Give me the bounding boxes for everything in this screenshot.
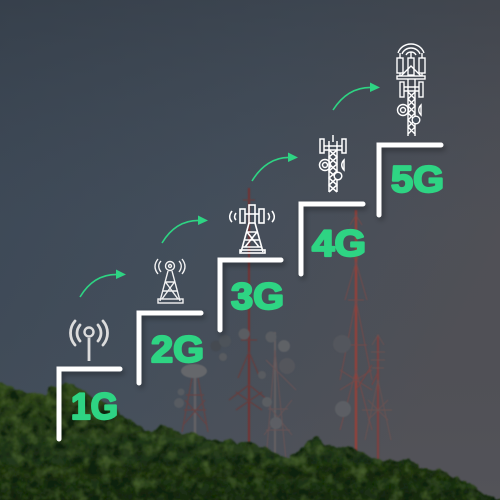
- label 5G: 5G: [391, 159, 444, 200]
- icon: 5G tower: [397, 44, 425, 136]
- step bracket 1G: [59, 369, 120, 439]
- tower C: [262, 332, 296, 462]
- step bracket 2G: [139, 313, 201, 383]
- step 3G: [220, 260, 284, 330]
- label 2G: 2G: [151, 329, 204, 370]
- tower B: [210, 188, 268, 444]
- step 2G: [139, 313, 204, 383]
- step bracket 5G: [379, 145, 441, 215]
- arrow: 3G to 4G: [252, 152, 298, 181]
- arrow: 1G to 2G: [80, 270, 126, 297]
- icon: 1G antenna: [70, 321, 108, 361]
- step 1G: [59, 369, 120, 439]
- icon: 3G tower: [230, 205, 274, 253]
- step 4G: [301, 204, 366, 274]
- arrow: 2G to 3G: [162, 216, 208, 243]
- step bracket 4G: [301, 204, 363, 274]
- step bracket 3G: [220, 260, 281, 330]
- arrow: 4G to 5G: [333, 82, 380, 110]
- tower E: [356, 335, 392, 466]
- tower A: [174, 364, 208, 436]
- label 3G: 3G: [231, 276, 284, 317]
- tower D: [333, 210, 372, 456]
- icon: 2G tower: [155, 259, 185, 303]
- background: forested hill: [0, 381, 500, 500]
- label 1G: 1G: [71, 386, 118, 427]
- icon: 4G tower: [320, 135, 346, 192]
- background: telecom towers: [174, 188, 392, 466]
- label 4G: 4G: [312, 223, 366, 264]
- step 5G: [379, 145, 444, 215]
